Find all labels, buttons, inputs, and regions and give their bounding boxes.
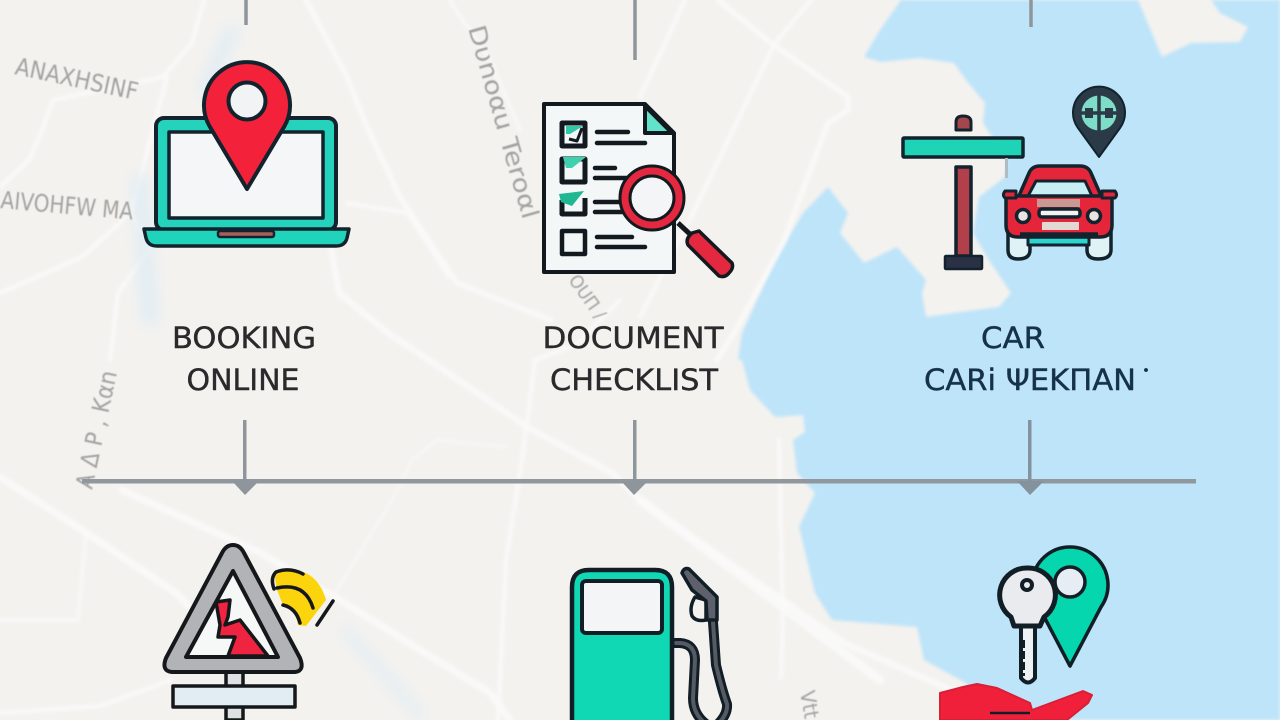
checkbox 3: [559, 191, 585, 214]
sign plate: [173, 686, 295, 707]
label line 2: CHECKLIST: [550, 363, 718, 397]
map label top left: ANAXHSINF: [13, 52, 141, 106]
label: [172, 321, 316, 397]
checkbox 1: [562, 123, 585, 146]
laptop notch: [218, 231, 274, 237]
step: document checklist: [542, 104, 733, 397]
step: fuel pump: [572, 568, 727, 720]
label line 1: CAR: [981, 321, 1045, 355]
horizontal timeline bar: [82, 479, 1196, 484]
step: key handover: [940, 547, 1108, 720]
map label lower vertical: A Δ Ρ , Kαn: [70, 368, 123, 491]
globe: [1082, 96, 1116, 130]
globe pin body: [1073, 87, 1125, 157]
car roof: [1018, 166, 1102, 198]
magnifier grip: [687, 231, 733, 277]
top ticks: [246, 0, 1031, 60]
checkbox 2: [562, 157, 586, 182]
key bow: [1000, 568, 1055, 626]
key teeth: [1021, 640, 1025, 676]
signal arcs: [272, 570, 333, 625]
icon: road sign post: [903, 116, 1023, 269]
checkbox 4: [562, 231, 585, 254]
hand crease: [990, 712, 1030, 714]
car headlight right: [1088, 210, 1100, 222]
pump hose left outer: [674, 643, 706, 720]
connector arrow 3: [1017, 420, 1044, 495]
checklist lines: [595, 132, 645, 247]
teal pin hole: [1055, 567, 1085, 597]
sign post: [226, 672, 243, 720]
red rockfall: [216, 600, 268, 656]
car mirrors: [1004, 191, 1116, 198]
connector arrow 1: [232, 420, 259, 495]
icon: checklist with magnifier: [544, 104, 733, 277]
label line 1: DOCUMENT: [542, 321, 724, 355]
paper: [544, 104, 674, 272]
pump body: [572, 570, 672, 720]
teal pin: [1032, 547, 1108, 666]
pump hose right outer: [713, 622, 727, 720]
pump screen: [582, 581, 662, 633]
map label under document: ΟUΠ /: [564, 271, 610, 325]
warning triangle: [164, 545, 302, 672]
pin hole: [228, 82, 266, 120]
step: booking online: [144, 62, 349, 397]
red hand: [940, 684, 1092, 720]
timeline connector: [82, 0, 1196, 495]
pump hose left inner: [676, 643, 706, 720]
post cap: [956, 116, 971, 130]
sign edge shadow: [1005, 158, 1008, 178]
magnifier handle: [678, 223, 692, 236]
warning triangle inner: [186, 571, 278, 657]
post base: [945, 256, 982, 269]
magnifier inner rim: [630, 176, 674, 220]
car body: [1006, 196, 1112, 237]
icon: red car: [1004, 166, 1116, 259]
laptop base: [144, 229, 349, 246]
car bumper: [1020, 232, 1098, 236]
roads: [0, 0, 958, 720]
step: car pickup: [903, 87, 1148, 397]
globe land blocks: [1085, 108, 1113, 118]
key hole: [1022, 580, 1032, 590]
car wheels: [1008, 232, 1111, 259]
post: [956, 167, 971, 256]
globe grid: [1081, 95, 1117, 131]
car headlight left: [1016, 210, 1030, 222]
laptop screen: [169, 132, 323, 218]
location pin: [204, 62, 290, 189]
car hood: [1037, 199, 1080, 207]
car grille: [1039, 209, 1080, 217]
water area: [738, 0, 1280, 720]
laptop lid: [156, 118, 336, 230]
map label middle left: AIVOHFW MA: [0, 186, 135, 226]
key blade: [1021, 625, 1035, 682]
faint river tints: [140, 30, 420, 715]
pump hose right inner: [713, 622, 727, 720]
icon: laptop with location pin: [144, 62, 349, 246]
connector arrow 2: [621, 420, 648, 495]
label: [924, 321, 1148, 397]
label: [542, 321, 724, 397]
car lower bar: [1028, 236, 1089, 245]
nozzle: [682, 568, 717, 620]
label line 2: ONLINE: [186, 363, 300, 397]
nozzle handle: [691, 597, 706, 620]
paper fold: [645, 106, 672, 133]
magnifier lens: [625, 171, 679, 225]
car plate: [1042, 222, 1079, 230]
label line 1: BOOKING: [172, 321, 316, 355]
magnifier outer rim: [620, 166, 684, 230]
yellow signal: [274, 570, 326, 626]
label line 2: CARi ΨEKΠAN: [924, 363, 1136, 397]
map place labels: [0, 22, 824, 720]
car windshield: [1028, 181, 1092, 196]
icon: globe pin: [1073, 87, 1125, 157]
sign board: [903, 138, 1023, 157]
step: road warning sign: [164, 545, 333, 720]
label dot: [1144, 368, 1148, 372]
map label road vertical: Dυnoαu Teroαl: [462, 22, 544, 222]
